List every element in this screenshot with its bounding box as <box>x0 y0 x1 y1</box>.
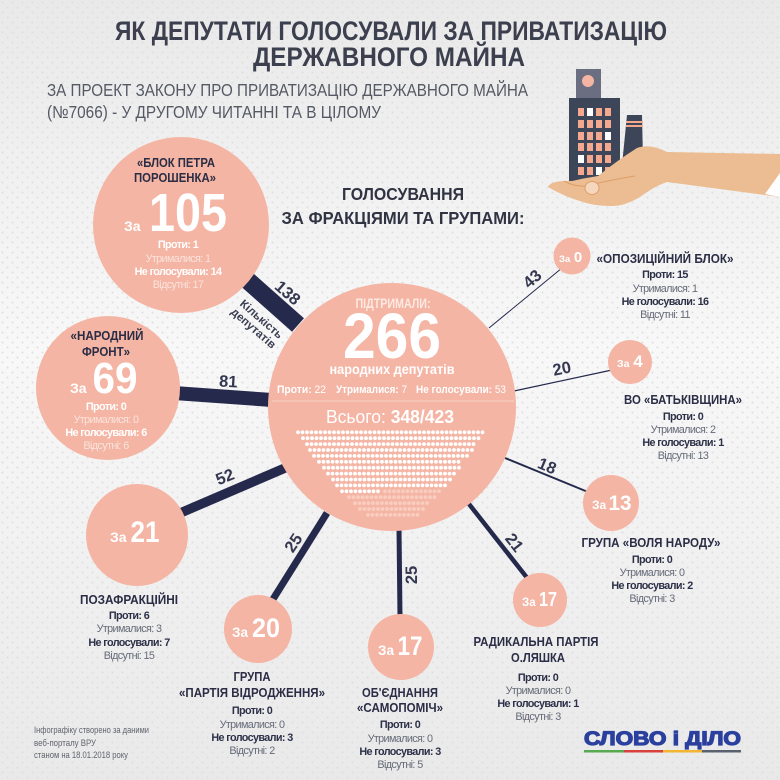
panel: central total circle: Утрималися: 7 <box>336 384 407 396</box>
heading: voting by factions: ГОЛОСУВАННЯ <box>342 184 464 204</box>
heading: voting by factions <box>282 184 524 228</box>
panel: Блок Петра Порошенка <box>93 137 269 313</box>
panel: Опозиційний блок: Не голосували: 16 <box>622 296 709 308</box>
connector: Воля народу 18 <box>505 455 588 492</box>
panel: Позафракційні: Утрималися: 3 <box>97 623 162 635</box>
title: ДЕРЖАВНОГО МАЙНА <box>253 41 525 72</box>
panel: Група Партія Відродження <box>179 595 325 757</box>
panel: Об'єднання Самопоміч: «САМОПОМІЧ» <box>357 700 443 715</box>
panel: Народний фронт: ФРОНТ» <box>82 344 130 359</box>
connector: Самопоміч 25 <box>399 528 421 618</box>
panel: Радикальна партія: За <box>522 597 536 609</box>
panel: Група Воля народу: Утрималися: 0 <box>620 567 685 579</box>
chart: parliament seats <box>298 432 485 515</box>
panel: Група Партія Відродження: Утрималися: 0 <box>220 719 285 731</box>
panel: Блок Петра Порошенка: «БЛОК ПЕТРА <box>137 155 216 170</box>
footnote: data source: станом на 18.01.2018 року <box>34 750 128 761</box>
panel: Народний фронт: Відсутні: 6 <box>83 440 129 452</box>
panel: Група Партія Відродження: ГРУПА <box>234 669 271 684</box>
panel: Радикальна партія: Утрималися: 0 <box>506 685 571 697</box>
panel: Група Воля народу: Проти: 0 <box>632 554 673 566</box>
panel: Народний фронт: Проти: 0 <box>86 401 127 413</box>
panel: Блок Петра Порошенка: 105 <box>149 183 227 243</box>
title <box>115 16 667 72</box>
panel: Група Воля народу: ГРУПА «ВОЛЯ НАРОДУ» <box>582 535 720 550</box>
panel: Народний фронт: Утрималися: 0 <box>74 414 139 426</box>
title: ЯК ДЕПУТАТИ ГОЛОСУВАЛИ ЗА ПРИВАТИЗАЦІЮ <box>115 16 667 46</box>
panel: Радикальна партія: Відсутні: 3 <box>515 711 561 723</box>
panel: central total circle: Не голосували: 53 <box>416 384 506 396</box>
panel: Опозиційний блок: «ОПОЗИЦІЙНИЙ БЛОК» <box>596 251 734 266</box>
panel: Народний фронт: «НАРОДНИЙ <box>70 328 144 343</box>
connector: Народний фронт 81 <box>160 373 272 400</box>
panel: Радикальна партія: 17 <box>539 589 557 611</box>
panel: Блок Петра Порошенка: Відсутні: 17 <box>153 279 204 291</box>
connector: БПП 138: депутатів <box>228 306 278 351</box>
panel: Група Партія Відродження: Відсутні: 2 <box>229 745 275 757</box>
connector bars with deputy counts <box>160 266 612 618</box>
panel: Опозиційний блок: Утрималися: 1 <box>633 283 698 295</box>
connector: БПП 138: Кількість <box>237 298 285 342</box>
panel: Блок Петра Порошенка: За <box>124 218 141 234</box>
connector: Позафракційні 52: 52 <box>213 466 237 489</box>
panel: central total circle: народних депутатів <box>330 362 454 377</box>
panel: Група Партія Відродження: Проти: 0 <box>232 705 273 717</box>
panel: ВО Батьківщина: Не голосували: 1 <box>642 437 724 449</box>
panel: Група Партія Відродження: «ПАРТІЯ ВІДРОДЖЕННЯ» <box>179 685 325 700</box>
panel: Блок Петра Порошенка: ПОРОШЕНКА» <box>134 170 216 185</box>
panel: Радикальна партія: РАДИКАЛЬНА ПАРТІЯ <box>474 634 598 649</box>
connector: Радикальна партія 21 <box>469 504 528 579</box>
panel: Об'єднання Самопоміч: Утрималися: 0 <box>368 733 433 745</box>
connector: Воля народу 18: 18 <box>535 455 559 478</box>
panel: Блок Петра Порошенка: Утрималися: 1 <box>146 253 211 265</box>
panel: Позафракційні: Проти: 6 <box>109 610 150 622</box>
connector: Радикальна партія 21: 21 <box>501 530 527 556</box>
panel: central total circle: Проти: 22 <box>277 384 326 396</box>
footnote: data source <box>34 725 149 761</box>
connector: БПП 138 <box>228 277 304 351</box>
connector: Батьківщина 20: 20 <box>551 358 573 380</box>
connector: Партія Відродження 25 <box>270 513 327 604</box>
panel: Група Партія Відродження: Не голосували: 3 <box>211 732 293 744</box>
panel: ВО Батьківщина: 4 <box>633 352 643 371</box>
connector: Батьківщина 20 <box>514 358 612 391</box>
panel: central total circle <box>268 283 516 531</box>
panel: ВО Батьківщина: Утрималися: 2 <box>651 424 716 436</box>
heading: voting by factions: ЗА ФРАКЦІЯМИ ТА ГРУПАМИ: <box>282 208 524 228</box>
panel: Народний фронт: Не голосували: 6 <box>65 427 147 439</box>
panel: Позафракційні: Не голосували: 7 <box>88 637 170 649</box>
panel: Позафракційні: За <box>110 529 127 545</box>
panel: Опозиційний блок: Відсутні: 11 <box>640 309 690 321</box>
panel: ВО Батьківщина <box>608 340 742 462</box>
panel: Група Партія Відродження: За <box>232 625 248 640</box>
panel: Об'єднання Самопоміч <box>357 614 443 771</box>
panel: Позафракційні: 21 <box>130 516 160 549</box>
subtitle: ЗА ПРОЕКТ ЗАКОНУ ПРО ПРИВАТИЗАЦІЮ ДЕРЖАВНОГО МАЙНА <box>47 79 528 100</box>
panel: Радикальна партія: Не голосували: 1 <box>497 698 579 710</box>
panel: ВО Батьківщина: Відсутні: 13 <box>658 450 709 462</box>
panel: Об'єднання Самопоміч: 17 <box>398 631 422 661</box>
panel: Група Воля народу: Не голосували: 2 <box>611 580 693 592</box>
panel: ВО Батьківщина: ВО «БАТЬКІВЩИНА» <box>624 392 742 407</box>
panel: Блок Петра Порошенка: Проти: 1 <box>158 239 199 251</box>
panel: Опозиційний блок: За <box>559 254 571 265</box>
connector: Опозиційний блок 43: 43 <box>520 266 545 292</box>
panel: Група Партія Відродження: 20 <box>252 613 280 643</box>
panel: Об'єднання Самопоміч: Проти: 0 <box>380 719 421 731</box>
panel: Об'єднання Самопоміч: За <box>378 643 394 658</box>
panel: ВО Батьківщина: За <box>617 358 630 370</box>
panel: Група Воля народу: За <box>592 498 607 512</box>
panel: Опозиційний блок: Проти: 15 <box>642 269 688 281</box>
panel: Об'єднання Самопоміч: ОБ'ЄДНАННЯ <box>362 685 438 700</box>
panel: central total circle: ПІДТРИМАЛИ: <box>356 295 430 311</box>
panel: central total circle: Всього: 348/423 <box>326 407 454 427</box>
subtitle <box>47 79 528 122</box>
panel: Народний фронт: 69 <box>92 354 138 403</box>
icon: hand holding building and factory <box>548 69 780 206</box>
panel: Позафракційні: ПОЗАФРАКЦІЙНІ <box>80 592 178 607</box>
connector: Самопоміч 25: 25 <box>403 566 421 584</box>
panel: Позафракційні <box>80 484 188 662</box>
panel: Радикальна партія: О.ЛЯШКА <box>511 650 566 665</box>
panel: Група Воля народу: Відсутні: 3 <box>629 593 675 605</box>
logo: Слово і Діло: СЛОВО і ДІЛО <box>584 729 741 750</box>
connector: Народний фронт 81: 81 <box>219 373 238 391</box>
panel: Народний фронт: За <box>70 380 87 396</box>
connector: Позафракційні 52 <box>178 466 285 514</box>
panel: Об'єднання Самопоміч: Не голосували: 3 <box>359 746 441 758</box>
panel: central total circle: 266 <box>343 300 441 372</box>
panel: ВО Батьківщина: Проти: 0 <box>663 411 704 423</box>
panel: Опозиційний блок: 0 <box>574 249 582 266</box>
panel: Опозиційний блок <box>554 238 734 321</box>
panel: Блок Петра Порошенка: Не голосували: 14 <box>135 266 222 278</box>
panel: Позафракційні: Відсутні: 15 <box>104 650 155 662</box>
subtitle: (№7066) - У ДРУГОМУ ЧИТАННІ ТА В ЦІЛОМУ <box>47 102 382 122</box>
panel: Радикальна партія: Проти: 0 <box>518 672 559 684</box>
panel: Група Воля народу: 13 <box>608 492 632 515</box>
footnote: data source: Інфографіку створено за даними <box>34 725 149 736</box>
connector: Партія Відродження 25: 25 <box>281 531 306 556</box>
connector: Опозиційний блок 43 <box>489 266 562 328</box>
panel: Радикальна партія <box>474 573 598 723</box>
panel: Народний фронт <box>36 316 180 460</box>
footnote: data source: веб-порталу ВРУ <box>34 738 97 749</box>
panel: Група Воля народу <box>582 475 720 605</box>
connector: БПП 138: 138 <box>271 277 304 309</box>
panel: Об'єднання Самопоміч: Відсутні: 5 <box>377 759 423 771</box>
